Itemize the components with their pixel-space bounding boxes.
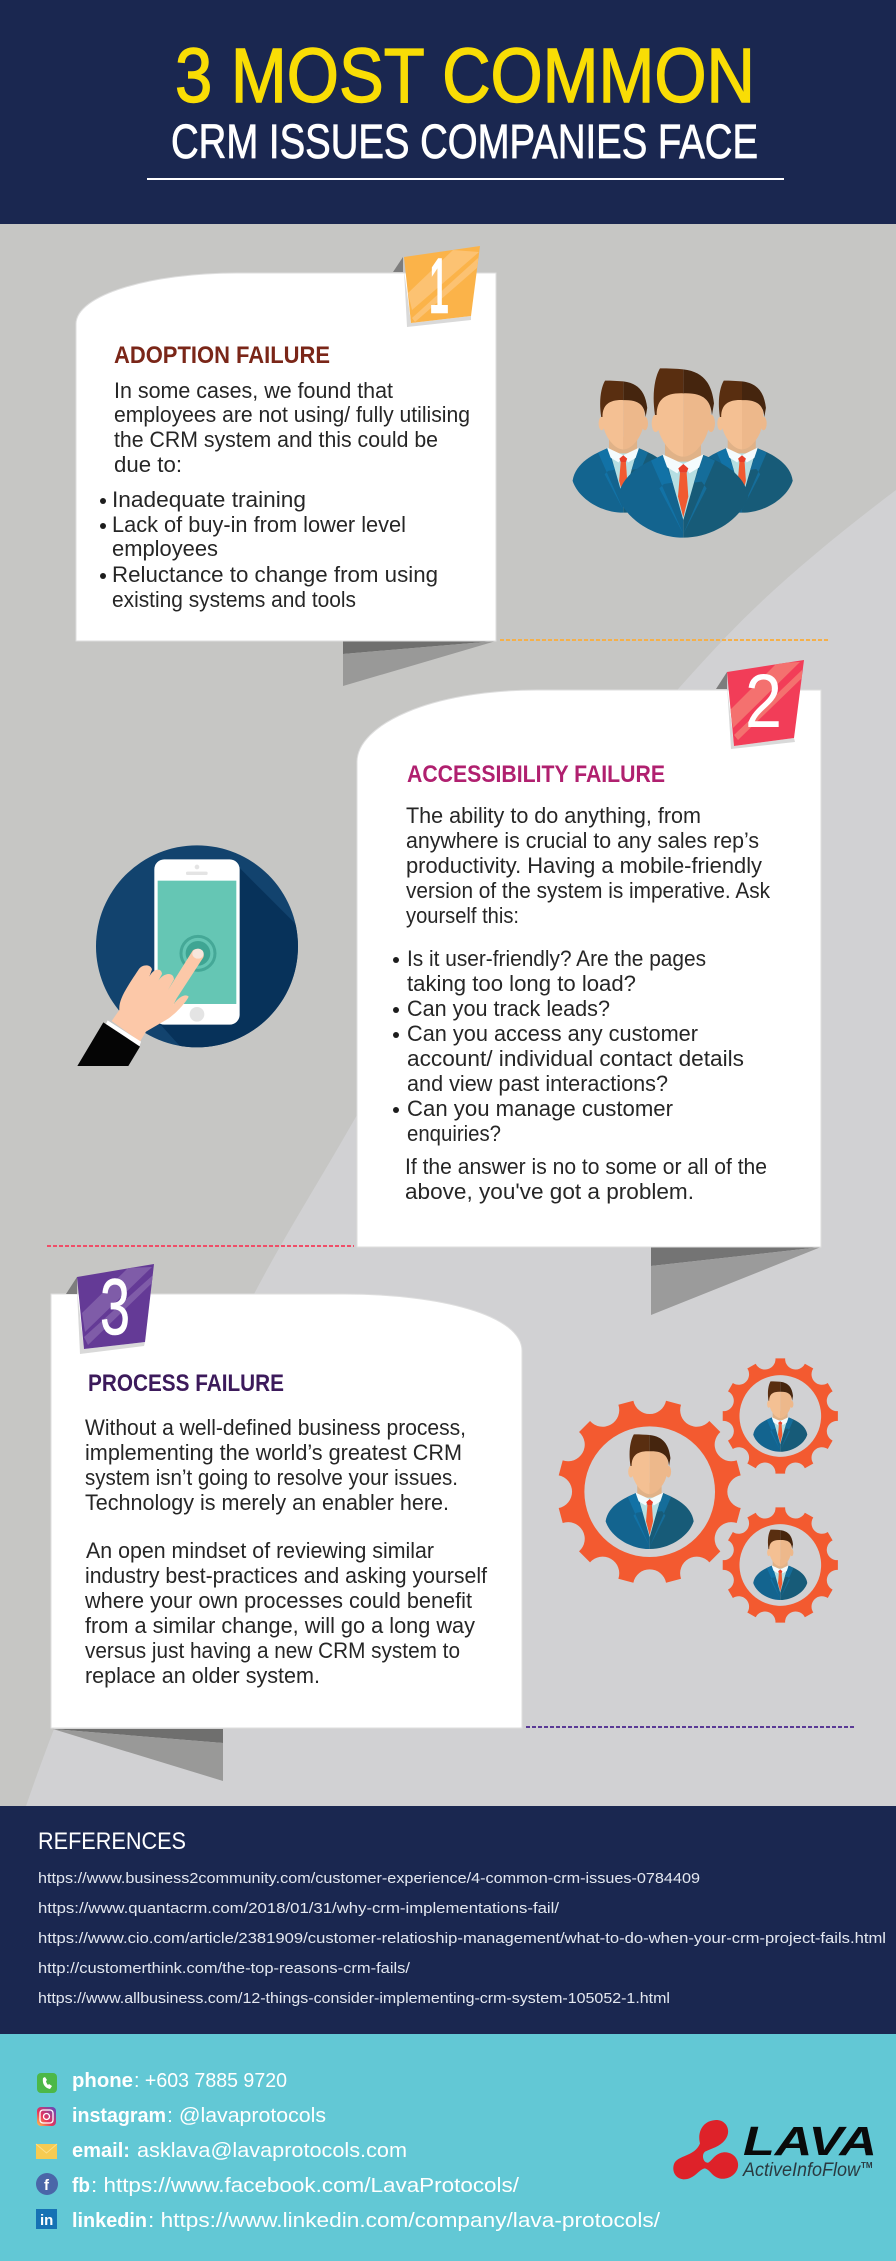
badge 3 <box>66 1262 154 1354</box>
paragraph two: where your own processes could benefit <box>84 1588 472 1613</box>
intro paragraph: the CRM system and this could be <box>114 427 438 452</box>
subtitle: CRM ISSUES COMPANIES FACE <box>171 116 758 169</box>
paragraph one: Technology is merely an enabler here. <box>85 1490 449 1515</box>
ribbon fold under card 2 <box>651 1247 821 1315</box>
badge 3: 3 <box>100 1262 130 1351</box>
reference links <box>38 1870 886 2007</box>
badge 1 <box>393 244 480 329</box>
question list: Can you access any customer <box>407 1021 698 1046</box>
question list <box>393 946 744 1146</box>
closing paragraph <box>405 1154 767 1204</box>
paragraph two: versus just having a new CRM system to <box>85 1638 460 1663</box>
small gear top <box>711 1346 850 1486</box>
bullet list <box>100 487 438 612</box>
panel: process failure <box>51 1262 522 1781</box>
question list: Is it user-friendly? Are the pages <box>407 946 706 971</box>
intro paragraph: In some cases, we found that <box>114 378 393 403</box>
badge 1: 1 <box>429 244 449 329</box>
icon: phone <box>37 2073 57 2093</box>
reference links: http://customerthink.com/the-top-reasons-crm-fails/ <box>38 1960 411 1977</box>
paragraph one: Without a well-defined business process, <box>85 1415 466 1440</box>
icon: instagram <box>37 2107 56 2126</box>
intro paragraph: anywhere is crucial to any sales rep’s <box>406 828 759 853</box>
question list: and view past interactions? <box>407 1071 668 1096</box>
trademark: TM <box>861 2161 873 2170</box>
heading: accessibility failure: ACCESSIBILITY FAILURE <box>407 761 665 788</box>
contact: email <box>36 2140 407 2162</box>
logo mark <box>673 2120 738 2179</box>
badge 2: 2 <box>745 659 782 744</box>
question list: account/ individual contact details <box>407 1046 744 1071</box>
intro paragraph: The ability to do anything, from <box>406 803 701 828</box>
closing paragraph: above, you've got a problem. <box>405 1179 694 1204</box>
panel: contact footer <box>0 2034 896 2261</box>
contact: instagram: : @lavaprotocols <box>167 2105 326 2127</box>
ribbon fold under card 1 <box>343 641 496 686</box>
contact: phone <box>37 2070 287 2093</box>
badge 2 <box>716 659 804 749</box>
question list: Can you track leads? <box>407 996 610 1021</box>
heading: adoption failure: ADOPTION FAILURE <box>114 342 330 369</box>
intro paragraph <box>114 378 470 477</box>
reference links: https://www.quantacrm.com/2018/01/31/why-crm-implementations-fail/ <box>38 1900 560 1917</box>
icon: hand tapping phone <box>77 845 300 1066</box>
intro paragraph <box>406 803 771 928</box>
icon: facebook: f <box>44 2177 50 2194</box>
contact: facebook: fb <box>72 2175 90 2197</box>
intro paragraph: version of the system is imperative. Ask <box>406 878 771 903</box>
icon: linkedin: in <box>40 2212 53 2229</box>
question list: taking too long to load? <box>407 971 636 996</box>
contact: linkedin <box>36 2209 660 2232</box>
ribbon fold under card 3 <box>53 1729 223 1781</box>
intro paragraph: yourself this: <box>406 903 519 928</box>
paragraph two: from a similar change, will go a long way <box>85 1613 475 1638</box>
panel: accessibility failure <box>357 659 821 1315</box>
heading: process failure: PROCESS FAILURE <box>88 1370 284 1397</box>
question list: enquiries? <box>407 1121 501 1146</box>
paragraph two <box>84 1538 488 1688</box>
intro paragraph: employees are not using/ fully utilising <box>114 402 470 427</box>
panel: references <box>0 1806 896 2034</box>
icon: linkedin <box>36 2209 57 2229</box>
icon: facebook <box>36 2173 58 2195</box>
contact: phone: phone <box>72 2070 133 2092</box>
background panel <box>0 224 896 1806</box>
contact: instagram <box>37 2105 326 2127</box>
panel: adoption failure <box>76 244 496 686</box>
card 1 background <box>76 273 496 641</box>
bullet list: Lack of buy-in from lower level <box>112 512 406 537</box>
closing paragraph: If the answer is no to some or all of the <box>405 1154 767 1179</box>
title: 3 MOST COMMON <box>175 33 755 119</box>
contact: facebook: : https://www.facebook.com/LavaProtocols/ <box>91 2175 519 2197</box>
paragraph one <box>85 1415 466 1515</box>
reference links: https://www.allbusiness.com/12-things-consider-implementing-crm-system-105052-1.html <box>38 1990 670 2007</box>
bullet list: Inadequate training <box>112 487 306 512</box>
header banner <box>0 0 896 224</box>
small gear bottom <box>711 1495 850 1635</box>
large gear <box>559 1401 741 1583</box>
intro paragraph: productivity. Having a mobile-friendly <box>406 853 762 878</box>
paragraph two: replace an older system. <box>85 1663 320 1688</box>
contact: phone: : +603 7885 9720 <box>134 2070 287 2092</box>
question list: Can you manage customer <box>407 1096 673 1121</box>
paragraph one: implementing the world’s greatest CRM <box>85 1440 462 1465</box>
card 3 background <box>51 1294 522 1728</box>
bullet list: employees <box>112 536 218 561</box>
icon: people in gears <box>559 1346 850 1635</box>
references heading: REFERENCES <box>38 1828 186 1855</box>
bullet list: Reluctance to change from using <box>112 562 438 587</box>
paragraph one: system isn’t going to resolve your issues. <box>85 1465 458 1490</box>
bullet list: existing systems and tools <box>112 587 356 612</box>
icon: envelope <box>36 2144 57 2159</box>
paragraph two: industry best-practices and asking yourself <box>85 1563 488 1588</box>
reference links: https://www.cio.com/article/2381909/customer-relatioship-management/what-to-do-when-your-crm-project-fails.html <box>38 1930 886 1947</box>
icon: business team <box>573 368 793 538</box>
paragraph two: An open mindset of reviewing similar <box>86 1538 434 1563</box>
card 2 background <box>357 690 821 1247</box>
contact: linkedin: : https://www.linkedin.com/company/lava-protocols/ <box>148 2210 660 2232</box>
contact: email: email: <box>72 2140 130 2162</box>
contact: email: asklava@lavaprotocols.com <box>137 2140 407 2162</box>
contact: linkedin: linkedin <box>72 2210 147 2232</box>
reference links: https://www.business2community.com/customer-experience/4-common-crm-issues-0784409 <box>38 1870 700 1887</box>
intro paragraph: due to: <box>114 452 182 477</box>
logo tagline: ActiveInfoFlow <box>742 2160 861 2181</box>
contact: instagram: instagram <box>72 2105 166 2127</box>
logo: lava activeinfoflow <box>673 2118 877 2181</box>
logo wordmark: LAVA <box>743 2118 877 2164</box>
